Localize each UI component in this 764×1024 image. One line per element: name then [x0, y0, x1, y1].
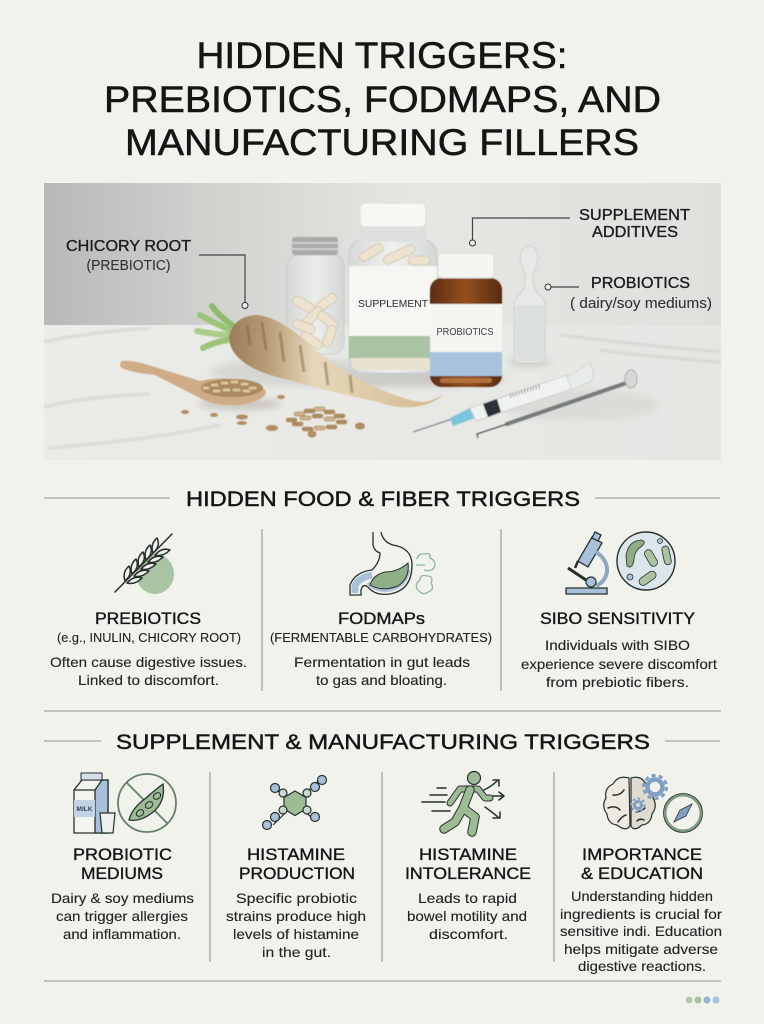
fodmaps text: Fermentation in gut leads: [294, 654, 470, 670]
probiotic mediums text: and inflammation.: [63, 926, 181, 942]
panel: prebiotics: [50, 534, 247, 688]
importance text: sensitive indi. Education: [560, 923, 722, 939]
wooden spoon with seeds: [120, 361, 266, 405]
icon: petri dish with bacteria: [617, 532, 675, 590]
probiotics bottle: [430, 253, 502, 387]
importance text: helps mitigate adverse: [564, 941, 718, 957]
icon: stomach with gas: [350, 532, 435, 595]
heading: hidden food and fiber triggers: HIDDEN FOOD & FIBER TRIGGERS: [186, 488, 580, 511]
panel: importance and education: [560, 776, 722, 974]
probiotics bottle label text: PROBIOTICS: [436, 327, 494, 338]
histamine intolerance text: INTOLERANCE: [405, 865, 531, 883]
supplement bottle label text: SUPPLEMENT: [358, 298, 429, 310]
small capsule jar: [287, 237, 344, 354]
panel: histamine production: [226, 776, 366, 960]
label: supplement additives: ADDITIVES: [592, 224, 678, 241]
prebiotics text: (e.g., INULIN, CHICORY ROOT): [57, 630, 241, 645]
importance text: IMPORTANCE: [582, 846, 702, 864]
histamine production text: [226, 846, 366, 960]
prebiotics text: Often cause digestive issues.: [50, 654, 247, 670]
label: chicory root: [66, 238, 248, 308]
histamine production text: strains produce high: [226, 908, 366, 924]
histamine production text: levels of histamine: [233, 926, 359, 942]
heading: supplement and manufacturing triggers: SUPPLEMENT & MANUFACTURING TRIGGERS: [116, 731, 650, 754]
importance text: [560, 846, 722, 974]
chicory root: [197, 306, 443, 407]
icon: microscope: [566, 532, 607, 594]
panel: product photo: [44, 183, 721, 460]
label: probiotics: PROBIOTICS: [591, 275, 690, 292]
prebiotics text: [50, 610, 247, 688]
label: supplement additives: SUPPLEMENT: [579, 207, 691, 224]
probiotic mediums text: PROBIOTIC: [73, 846, 172, 864]
icon: milk carton and glass: MILK: [76, 806, 93, 813]
shadows on table: [198, 357, 660, 421]
title: MANUFACTURING FILLERS: [125, 122, 639, 163]
label: probiotics: ( dairy/soy mediums): [570, 296, 712, 312]
prebiotics text: Linked to discomfort.: [78, 672, 219, 688]
histamine intolerance text: HISTAMINE: [419, 846, 517, 864]
sibo text: Individuals with SIBO: [545, 637, 690, 653]
importance text: & EDUCATION: [581, 865, 703, 883]
icon: gears: [632, 776, 666, 812]
histamine intolerance text: bowel motility and: [407, 908, 527, 924]
probiotic mediums text: [51, 846, 194, 942]
histamine intolerance text: Leads to rapid: [418, 890, 517, 906]
label: chicory root: CHICORY ROOT: [66, 238, 192, 255]
histamine production text: Specific probiotic: [236, 890, 357, 906]
label: supplement additives: [470, 207, 691, 246]
icon: brain: [604, 777, 655, 829]
sibo text: [521, 610, 717, 690]
label: probiotics: [545, 275, 712, 312]
icon: milk carton and glass: [74, 773, 115, 833]
dental probe: [477, 370, 637, 438]
histamine intolerance text: discomfort.: [429, 926, 508, 942]
fodmaps text: FODMAPs: [338, 610, 425, 628]
importance text: digestive reactions.: [578, 958, 706, 974]
histamine production text: in the gut.: [262, 944, 331, 960]
probiotic mediums text: can trigger allergies: [56, 908, 188, 924]
fodmaps text: (FERMENTABLE CARBOHYDRATES): [270, 630, 492, 645]
label: chicory root: (PREBIOTIC): [86, 258, 170, 274]
histamine production text: HISTAMINE: [247, 846, 345, 864]
importance text: Understanding hidden: [571, 888, 713, 904]
histamine production text: PRODUCTION: [239, 865, 355, 883]
title: [104, 35, 661, 163]
panel: probiotic mediums: [51, 773, 194, 942]
probiotic mediums text: MEDIUMS: [81, 865, 163, 883]
histamine intolerance text: [405, 846, 531, 942]
fodmaps text: to gas and bloating.: [316, 672, 447, 688]
probiotic mediums text: Dairy & soy mediums: [51, 890, 194, 906]
icon: molecule: [262, 776, 326, 830]
panel: fodmaps: [270, 532, 492, 688]
prebiotics text: PREBIOTICS: [95, 610, 201, 628]
fodmaps text: [270, 610, 492, 688]
sibo text: from prebiotic fibers.: [546, 674, 689, 690]
icon: compass: [664, 794, 702, 832]
importance text: ingredients is crucial for: [560, 906, 722, 922]
title: HIDDEN TRIGGERS:: [196, 35, 568, 76]
supplement bottle: [349, 203, 437, 373]
scattered seeds: [181, 395, 365, 438]
icon: running person: [422, 772, 504, 832]
footer pagination dots: [686, 996, 720, 1004]
panel: sibo sensitivity: [521, 532, 717, 690]
glass ampoule: [514, 246, 545, 363]
icon: crossed-out soybean: [118, 774, 176, 832]
sibo text: SIBO SENSITIVITY: [540, 610, 695, 628]
sibo text: experience severe discomfort: [521, 656, 717, 672]
syringe: [413, 363, 593, 432]
icon: wheat: [115, 534, 174, 594]
title: PREBIOTICS, FODMAPS, AND: [104, 79, 661, 120]
panel: histamine intolerance: [405, 772, 531, 942]
